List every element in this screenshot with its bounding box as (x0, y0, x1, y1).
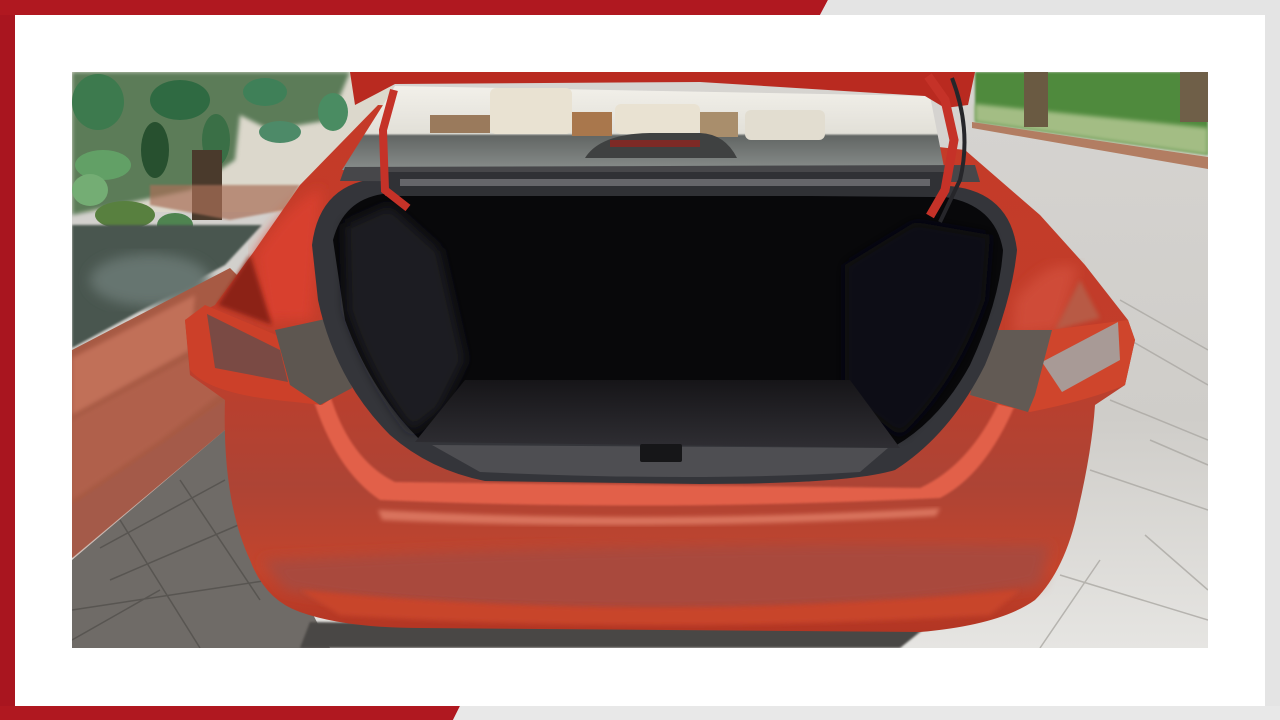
icon: car body silhouette (185, 105, 1135, 632)
icon: body highlights (218, 188, 1100, 625)
icon: left tail lamp (185, 305, 352, 405)
icon: right tail lamp (970, 320, 1135, 412)
icon: boot opening (312, 178, 1017, 484)
photo: car rear with open boot (72, 72, 1208, 648)
background: paving and garden (72, 72, 1208, 648)
icon: open boot lid with rear glass (340, 72, 980, 222)
